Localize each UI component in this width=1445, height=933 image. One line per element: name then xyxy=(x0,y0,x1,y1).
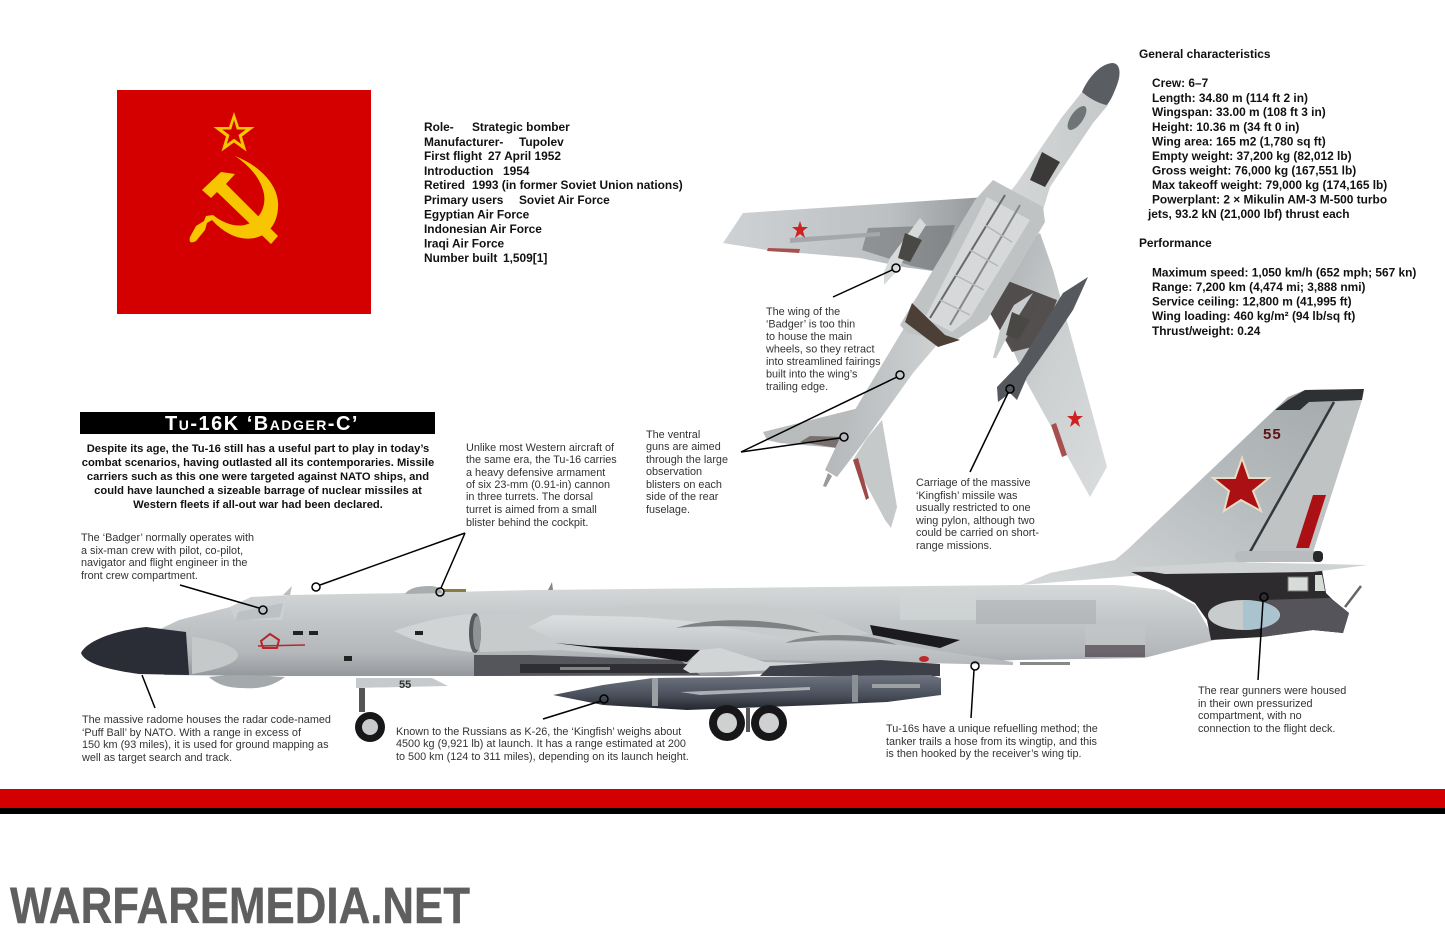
general characteristics list: Gross weight: 76,000 kg (167,551 lb) xyxy=(1152,164,1356,178)
sighting blister xyxy=(1208,600,1280,630)
dark lower fuselage band xyxy=(474,655,700,676)
callout: wing and main wheels: to house the main xyxy=(766,331,852,343)
aircraft specification list: First flight xyxy=(424,149,482,163)
right tailplane xyxy=(853,420,897,528)
callout: refuelling: is then hooked by the receiver’s wing tip. xyxy=(886,748,1082,760)
callout: defensive armament: in three turrets. The dorsal xyxy=(466,491,593,503)
callout: wing and main wheels: into streamlined fairings xyxy=(766,356,881,368)
engine intake fairing xyxy=(394,614,472,652)
callout: defensive armament: of six 23-mm (0.91-in) cannon xyxy=(466,479,610,491)
national stars xyxy=(792,221,808,238)
icon: star xyxy=(214,112,254,152)
Kingfish missile xyxy=(997,277,1088,402)
callout: refuelling: Tu-16s have a unique refuelling method; the xyxy=(886,723,1098,735)
dorsal turret xyxy=(405,586,443,594)
aircraft specification list: Number built xyxy=(424,251,497,265)
fin star xyxy=(1213,458,1269,511)
lead paragraph: Despite its age, the Tu-16 still has a useful part to play in today’s xyxy=(87,443,429,455)
fuselage xyxy=(825,92,1108,477)
lead paragraph: Western fleets if all-out war had been declared. xyxy=(133,499,383,511)
callout: crew: a six-man crew with pilot, co-pilot, xyxy=(81,545,243,557)
rear windows xyxy=(1288,577,1308,591)
callout: Kingfish carriage: could be carried on short- xyxy=(916,527,1039,539)
camouflage patches xyxy=(976,600,1096,624)
callout: ventral guns: guns are aimed xyxy=(646,441,721,453)
icon: hammer and sickle xyxy=(190,156,278,244)
general characteristics list: Wing area: 165 m2 (1,780 sq ft) xyxy=(1152,134,1326,148)
callout: wing and main wheels: The wing of the xyxy=(766,306,840,318)
aircraft specification list: 1,509[1] xyxy=(503,251,547,265)
callout: rear gunners: in their own pressurized xyxy=(1198,698,1313,710)
aircraft specification list: Soviet Air Force xyxy=(519,193,610,207)
callout: radome: The massive radome houses the radar code-named xyxy=(82,714,331,726)
title bar xyxy=(80,412,435,435)
callout: defensive armament: blister behind the cockpit. xyxy=(466,517,588,529)
lead paragraph: combat scenarios, having outlasted all its contemporaries. Missile xyxy=(82,457,434,469)
callout: radome xyxy=(81,714,331,764)
callout: crew xyxy=(81,532,254,582)
engine block xyxy=(900,180,1045,342)
general characteristics list: jets, 93.2 kN (21,000 lbf) thrust each xyxy=(1147,207,1350,221)
callout: K-26 Kingfish: to 500 km (124 to 311 miles), depending on its launch height. xyxy=(396,751,689,763)
callout: radome: well as target search and track. xyxy=(81,752,232,764)
wing fences xyxy=(676,620,820,633)
aircraft specification list xyxy=(424,120,683,265)
callout: wing and main wheels: built into the wing’s xyxy=(766,368,858,380)
aircraft specification list: Tupolev xyxy=(519,135,564,149)
callout: defensive armament: turret is aimed from a small xyxy=(466,504,597,516)
canopy blister xyxy=(1064,103,1090,133)
belly radar xyxy=(209,675,285,688)
aircraft specification list: Iraqi Air Force xyxy=(424,236,505,250)
main gear xyxy=(709,705,787,741)
under-wing pylon xyxy=(683,648,840,673)
callout: defensive armament: the same era, the Tu-16 carries xyxy=(466,454,617,466)
Kingfish missile xyxy=(553,675,941,710)
fuselage windows xyxy=(293,631,303,635)
main gear fairings xyxy=(884,218,926,285)
callout: defensive armament xyxy=(466,442,617,529)
engine block ribs xyxy=(940,225,1012,315)
tail guns xyxy=(823,473,832,487)
performance list: Range: 7,200 km (4,474 mi; 3,888 nmi) xyxy=(1152,280,1366,294)
right wing xyxy=(990,233,1107,497)
general characteristics list: Length: 34.80 m (114 ft 2 in) xyxy=(1152,91,1308,105)
aircraft illustration: side view xyxy=(81,389,1368,742)
cockpit canopy xyxy=(230,596,287,620)
nose gear fairing xyxy=(356,678,448,688)
aircraft specification list: Retired xyxy=(424,178,465,192)
aircraft specification list: Manufacturer- xyxy=(424,135,503,149)
tail gun xyxy=(1345,586,1361,607)
callout: ventral guns: The ventral xyxy=(646,429,700,441)
aircraft specification list: Strategic bomber xyxy=(472,120,570,134)
callout: rear gunners xyxy=(1198,685,1346,735)
lead paragraph: carriers such as this one were targeted against NATO ships, and xyxy=(87,471,429,483)
fin code 55: 55 xyxy=(1263,426,1282,443)
callout: ventral guns: blisters on each xyxy=(646,479,722,491)
callout: K-26 Kingfish xyxy=(396,726,689,763)
brand wordmark: WARFAREMEDIA.NET xyxy=(10,877,470,933)
performance list: Wing loading: 460 kg/m² (94 lb/sq ft) xyxy=(1152,309,1355,323)
cockpit bay xyxy=(1030,152,1060,187)
general characteristics list: General characteristics xyxy=(1139,47,1271,61)
callout: wing and main wheels xyxy=(765,306,881,393)
general characteristics list: Height: 10.36 m (34 ft 0 in) xyxy=(1152,120,1299,134)
callout: radome: ‘Puff Ball’ by NATO. With a range in excess of xyxy=(82,727,302,739)
refuelling marking xyxy=(919,656,929,662)
performance list: Performance xyxy=(1139,236,1212,250)
callout: rear gunners: connection to the flight deck. xyxy=(1198,723,1335,735)
callout: defensive armament: Unlike most Western aircraft of xyxy=(466,442,615,454)
flag: Soviet Union xyxy=(117,90,371,314)
blister nose antenna xyxy=(283,586,292,595)
forward panel xyxy=(192,637,238,674)
fuselage body xyxy=(154,585,1215,676)
callout: refuelling: tanker trails a hose from its wingtip, and this xyxy=(886,736,1098,748)
radome xyxy=(81,627,189,675)
callout: defensive armament: a heavy defensive armament xyxy=(466,467,605,479)
callout: Kingfish carriage: ‘Kingfish’ missile was xyxy=(916,490,1018,502)
callout: Kingfish carriage: range missions. xyxy=(916,540,992,552)
general characteristics list: Max takeoff weight: 79,000 kg (174,165 lb) xyxy=(1152,178,1387,192)
refuelling probe xyxy=(1020,662,1070,665)
callout: radome: 150 km (93 miles), it is used for ground mapping as xyxy=(82,739,329,751)
aircraft specification list: Egyptian Air Force xyxy=(424,208,530,222)
performance list: Maximum speed: 1,050 km/h (652 mph; 567 kn) xyxy=(1152,266,1416,280)
general characteristics list xyxy=(1139,47,1387,221)
aircraft specification list: 1954 xyxy=(503,164,530,178)
general characteristics list: Crew: 6–7 xyxy=(1152,76,1209,90)
callout: wing and main wheels: wheels, so they retract xyxy=(765,344,874,356)
callout: rear gunners: compartment, with no xyxy=(1198,710,1302,722)
leader lines and markers xyxy=(142,264,1268,719)
radome xyxy=(1082,63,1120,105)
aircraft specification list: Primary users xyxy=(424,193,503,207)
performance list: Service ceiling: 12,800 m (41,995 ft) xyxy=(1152,294,1352,308)
callout: ventral guns: observation xyxy=(646,466,702,478)
callout: K-26 Kingfish: 4500 kg (9,921 lb) at launch. It has a range estimated at 200 xyxy=(396,738,686,750)
left wing xyxy=(723,197,1000,275)
callout: Kingfish carriage: wing pylon, although two xyxy=(915,515,1035,527)
jet pipe opening xyxy=(870,625,960,648)
engine nacelle xyxy=(480,605,870,660)
general characteristics list: Powerplant: 2 × Mikulin AM-3 M-500 turbo xyxy=(1152,192,1387,206)
callout: wing and main wheels: trailing edge. xyxy=(766,381,828,393)
callout: wing and main wheels: ‘Badger’ is too thin xyxy=(766,318,855,330)
callout: crew: The ‘Badger’ normally operates with xyxy=(81,532,254,544)
aircraft specification list: 1993 (in former Soviet Union nations) xyxy=(472,178,683,192)
callout: K-26 Kingfish: Known to the Russians as K-26, the ‘Kingfish’ weighs about xyxy=(396,726,681,738)
lead paragraph xyxy=(82,443,434,511)
callout: crew: front crew compartment. xyxy=(81,570,198,582)
callout: refuelling xyxy=(886,723,1098,760)
wing xyxy=(528,615,1013,665)
callout: rear gunners: The rear gunners were housed xyxy=(1198,685,1346,697)
callout: ventral guns: side of the rear xyxy=(646,491,719,503)
callout: ventral guns xyxy=(646,429,728,516)
rear gunner compartment xyxy=(1131,570,1349,640)
callout: ventral guns: through the large xyxy=(646,454,728,466)
aircraft specification list: Role- xyxy=(424,120,454,134)
title bar: Tu-16K ‘Badger-C’ xyxy=(165,413,359,435)
footer stripe xyxy=(0,789,1445,814)
performance list: Thrust/weight: 0.24 xyxy=(1152,324,1261,338)
callout: Kingfish carriage: usually restricted to one xyxy=(916,502,1031,514)
general characteristics list: Empty weight: 37,200 kg (82,012 lb) xyxy=(1152,149,1352,163)
fuselage insignia xyxy=(258,634,305,648)
callout: crew: navigator and flight engineer in the xyxy=(81,557,247,569)
aircraft specification list: Indonesian Air Force xyxy=(424,222,542,236)
aircraft specification list: Introduction xyxy=(424,164,493,178)
callout: ventral guns: fuselage. xyxy=(646,504,690,516)
tailplane xyxy=(1129,562,1368,574)
fin and rudder xyxy=(1021,389,1364,585)
left tailplane xyxy=(763,407,863,448)
aircraft specification list: 27 April 1952 xyxy=(488,149,561,163)
general characteristics list: Wingspan: 33.00 m (108 ft 3 in) xyxy=(1152,105,1326,119)
lead paragraph: could have launched a sizeable barrage of nuclear missiles at xyxy=(94,485,422,497)
callout: Kingfish carriage xyxy=(915,477,1039,552)
performance list xyxy=(1139,236,1416,338)
callout: Kingfish carriage: Carriage of the massive xyxy=(916,477,1031,489)
nose gear xyxy=(355,688,385,742)
fuselage code 55: 55 xyxy=(399,679,411,691)
tail pod xyxy=(1235,551,1323,562)
aircraft illustration: underside view xyxy=(723,63,1120,528)
